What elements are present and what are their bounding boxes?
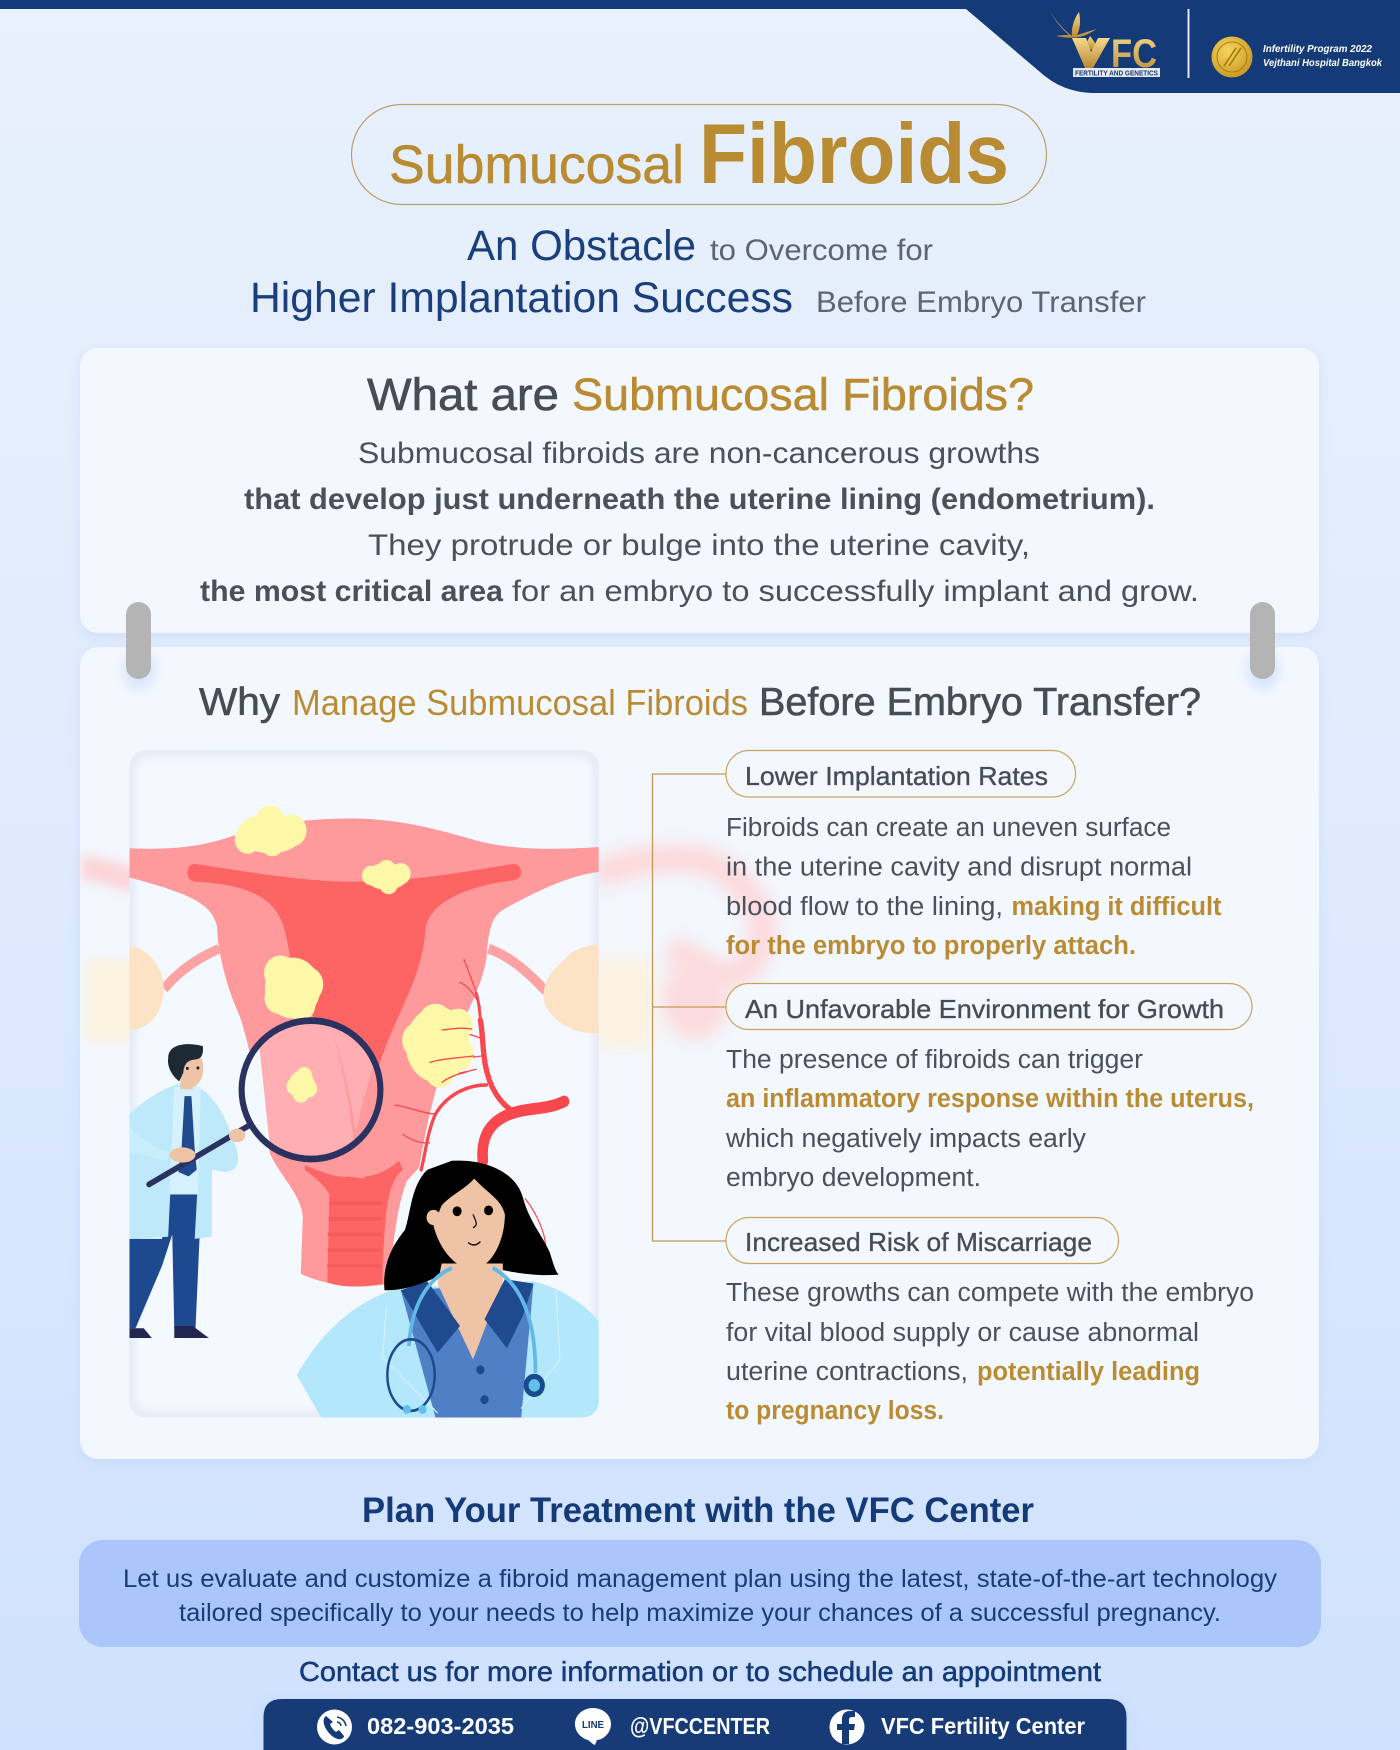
phone number: 082-903-2035 [367,1713,514,1739]
accreditation text: Vejthani Hospital Bangkok [1263,58,1382,69]
heading: What are [367,369,559,420]
icon: facebook [830,1710,864,1744]
title pill: Submucosal [389,135,684,195]
panel: what are submucosal fibroids [80,348,1319,633]
fibroid: cavity top [362,860,411,894]
fibroid: right wall with veins [402,1004,474,1088]
illustration card [129,750,599,1418]
heading: Why [199,681,281,724]
female doctor [297,1161,599,1418]
heading: Submucosal Fibroids? [572,369,1034,420]
logo: VFC Fertility and Genetics: FERTILITY AND GENETICS [1075,68,1158,78]
male doctor [129,1044,250,1338]
definition text: for an embryo to successfully implant and grow. [512,575,1199,608]
ovaries [129,945,599,1033]
icon: phone [317,1710,352,1744]
item: increased risk of miscarriage: to pregnancy loss. [726,1397,944,1425]
icon: LINE: LINE [582,1720,604,1731]
panel: why manage fibroids [80,647,1319,1459]
item: lower implantation rates: making it difficult [1012,893,1222,921]
callout: treatment plan [79,1540,1321,1647]
item: increased risk of miscarriage: uterine contractions, [726,1358,968,1386]
icon: gold accreditation medal [1212,36,1252,78]
icon: LINE [575,1708,611,1745]
magnifying glass [242,1016,382,1168]
definition text: Submucosal fibroids are non-cancerous growths [358,437,1040,470]
heading [367,369,1034,420]
title pill [352,104,1046,204]
subtitle [250,222,1146,322]
item: increased risk of miscarriage: for vital blood supply or cause abnormal [726,1319,1199,1347]
item: unfavorable environment: embryo development. [726,1164,981,1192]
header banner [0,0,1400,93]
logo: VFC Fertility and Genetics: FC [1111,32,1157,76]
fibroid: cavity left [264,955,323,1021]
accreditation text: Infertility Program 2022 [1263,44,1372,55]
blurred ghost of uterus outside the card [82,858,763,1048]
facebook name: VFC Fertility Center [881,1713,1085,1739]
definition text: the most critical area [200,575,503,608]
fibroid: top [235,805,307,856]
item: unfavorable environment: an inflammatory response within the uterus, [726,1085,1254,1113]
logo: VFC Fertility and Genetics [1050,11,1160,78]
item: unfavorable environment [725,984,1254,1192]
item: unfavorable environment: An Unfavorable Environment for Growth [745,994,1224,1024]
item: unfavorable environment: The presence of fibroids can trigger [726,1046,1144,1074]
title pill: Fibroids [699,107,1009,202]
heading: Before Embryo Transfer? [759,681,1201,724]
definition text: that develop just underneath the uterine lining (endometrium). [244,483,1155,516]
item: lower implantation rates: Fibroids can create an uneven surface [726,814,1171,842]
item: increased risk of miscarriage: Increased Risk of Miscarriage [745,1227,1092,1257]
uterus [129,818,599,1287]
plan heading: Plan Your Treatment with the VFC Center [362,1491,1034,1530]
heading [199,681,1201,724]
subtitle: to Overcome for [710,234,933,267]
accreditation text [1263,44,1382,69]
item: increased risk of miscarriage [726,1218,1254,1425]
item: increased risk of miscarriage: These growths can compete with the embryo [726,1279,1254,1307]
bracket connector [652,774,726,1241]
item: lower implantation rates: Lower Implantation Rates [745,761,1048,791]
item: unfavorable environment: which negatively impacts early [725,1125,1086,1153]
blood vessels [395,960,564,1248]
subtitle: An Obstacle [467,222,696,270]
binder clip right [1246,602,1280,690]
contact bar [264,1699,1126,1750]
heading: Manage Submucosal Fibroids [292,682,748,723]
contact heading: Contact us for more information or to schedule an appointment [299,1656,1101,1687]
item: lower implantation rates: in the uterine cavity and disrupt normal [726,854,1192,882]
callout: treatment plan: Let us evaluate and customize a fibroid management plan using the latest, state-of-the-art technology [123,1565,1278,1593]
callout: treatment plan: tailored specifically to your needs to help maximize your chances of a successful pregnancy. [179,1599,1221,1627]
item: lower implantation rates: for the embryo to properly attach. [726,932,1136,960]
item: lower implantation rates [726,750,1222,960]
item: lower implantation rates: blood flow to the lining, [726,893,1003,921]
subtitle: Higher Implantation Success [250,274,793,322]
item: increased risk of miscarriage: potentially leading [977,1358,1200,1386]
subtitle: Before Embryo Transfer [816,286,1146,319]
line handle: @VFCCENTER [630,1713,770,1739]
binder clip left [122,602,156,690]
definition text: They protrude or bulge into the uterine cavity, [368,529,1030,562]
definition text [200,437,1199,608]
